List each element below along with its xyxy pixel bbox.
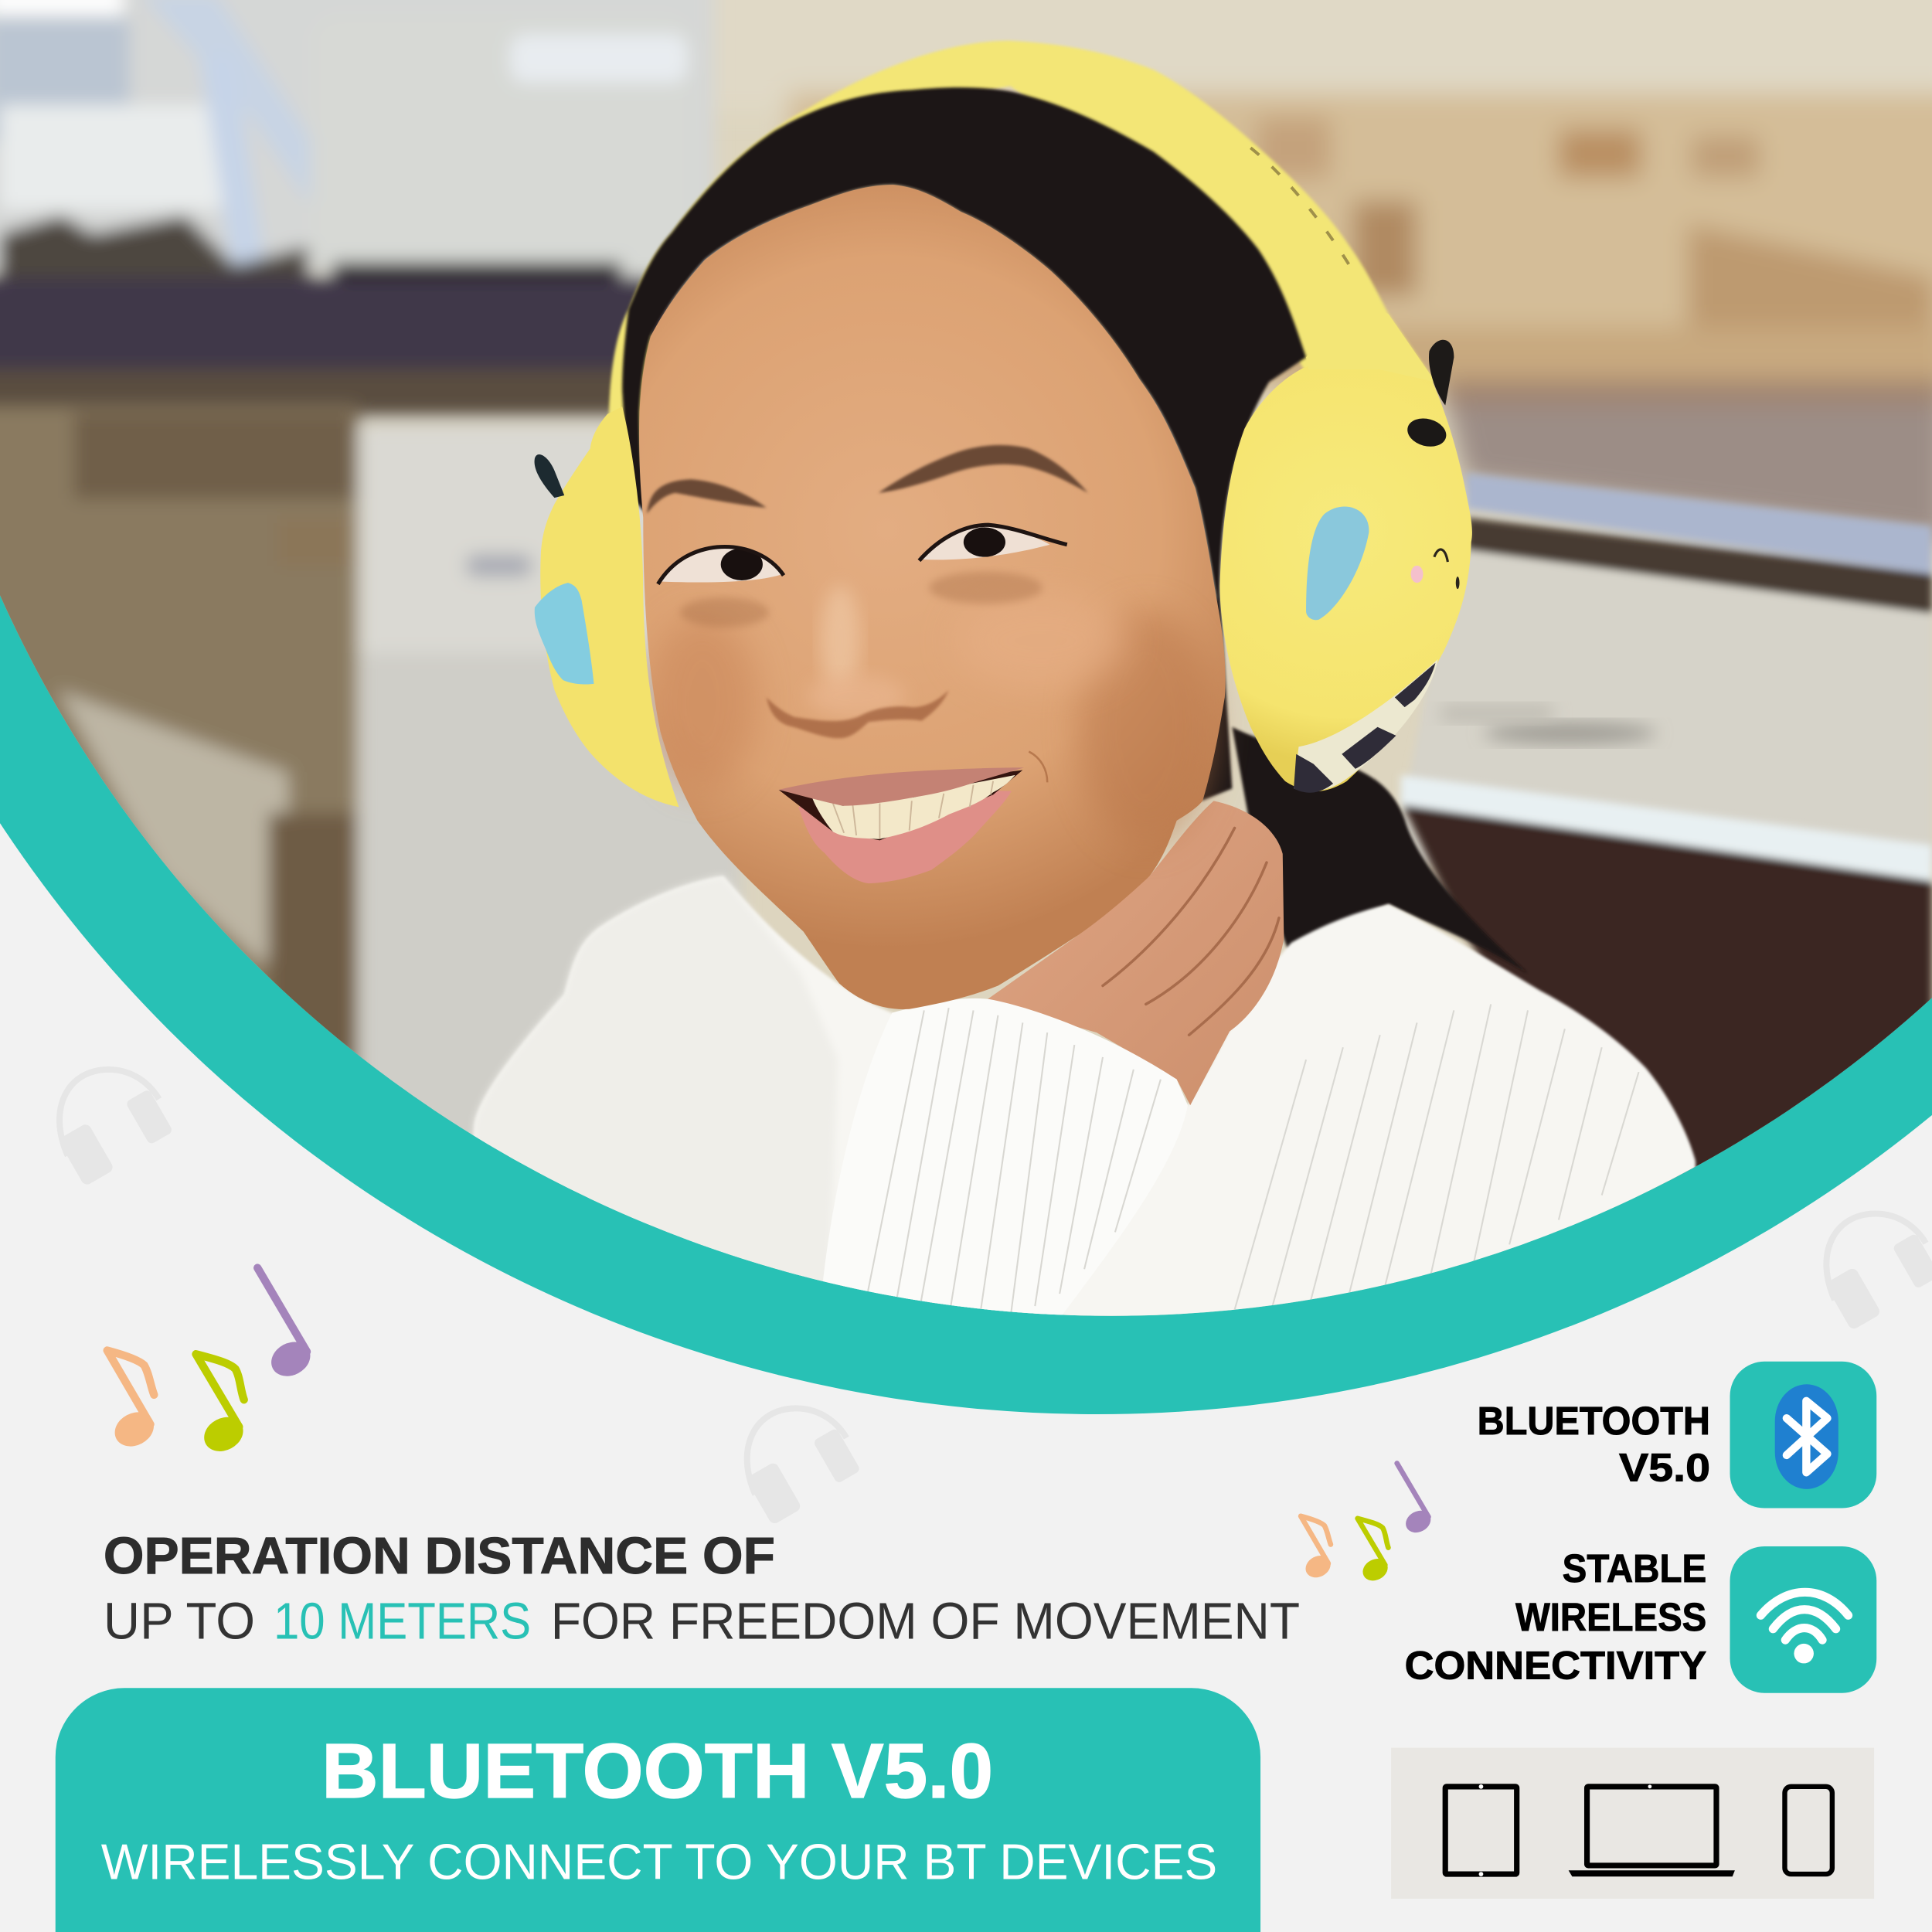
cheek shading right (1078, 610, 1213, 844)
smile crease (1029, 752, 1047, 782)
feature label: stable wireless connectivity: WIRELESS (1515, 1595, 1706, 1639)
bee eye spot (1404, 414, 1449, 451)
bee stripes (1294, 659, 1438, 793)
sweater cuff (819, 998, 1188, 1318)
lower lip (798, 788, 1012, 883)
text: up to 10 meters for freedom of movement (104, 1593, 1300, 1651)
under-eye shadow right (929, 572, 1043, 604)
panel: compatible devices (1391, 1748, 1874, 1899)
left eye (658, 547, 784, 584)
photo background: blurred kitchen (0, 0, 1932, 1355)
cheek glow (1006, 611, 1131, 686)
white ribbed sweater (471, 874, 1698, 1316)
banner heading: BLUETOOTH V5.0 (321, 1728, 993, 1815)
feature label: bluetooth v5.0 (1478, 1399, 1710, 1489)
hand on neck (986, 801, 1284, 1105)
blue wing left (535, 583, 594, 684)
left eyebrow (647, 479, 767, 514)
music notes group large (107, 1268, 316, 1458)
icon: smartphone (1784, 1787, 1832, 1874)
antenna left (535, 454, 564, 498)
under-eye shadow left (680, 597, 769, 628)
text: up to 10 meters for freedom of movement: FOR FREEDOM OF MOVEMENT (551, 1593, 1300, 1651)
banner subtext: WIRELESSLY CONNECT TO YOUR BT DEVICES (101, 1833, 1217, 1889)
panel: bluetooth v5.0 banner (56, 1688, 1260, 1932)
teeth (812, 775, 1015, 839)
feature label: stable wireless connectivity: STABLE (1563, 1546, 1706, 1590)
decorative headphone watermark right (1825, 1213, 1932, 1331)
feature label: stable wireless connectivity (1405, 1546, 1706, 1687)
icon: bluetooth tile (1730, 1362, 1876, 1509)
band joint (1306, 310, 1435, 382)
face (639, 185, 1226, 1009)
icon: laptop (1569, 1784, 1735, 1876)
cheek shading left (647, 616, 758, 788)
orange note (107, 1350, 160, 1453)
green note (196, 1354, 249, 1458)
decorative headphone watermark centre (745, 1408, 861, 1526)
purple note (257, 1268, 316, 1383)
dark hair (622, 87, 1306, 801)
chair (1401, 775, 1932, 1183)
nose (767, 585, 949, 738)
right eyebrow (879, 445, 1088, 493)
smile lips and teeth (779, 752, 1047, 883)
feature label: bluetooth v5.0: V5.0 (1619, 1445, 1710, 1489)
text: up to 10 meters for freedom of movement: UP TO (104, 1593, 255, 1651)
right ear cup: plush bee (1219, 310, 1472, 793)
photo: smiling girl wearing bee earmuff headphones (0, 0, 1932, 1380)
blue wing (1306, 506, 1369, 620)
teal curved band (0, 0, 1932, 1414)
music notes group small (1301, 1463, 1434, 1585)
decorative headphone watermark left (58, 1070, 173, 1186)
feature label: stable wireless connectivity: CONNECTIVITY (1405, 1643, 1706, 1687)
heading: operation distance: OPERATION DISTANCE OF (104, 1527, 775, 1585)
icon: tablet (1445, 1784, 1517, 1876)
icon: wifi tile (1730, 1546, 1876, 1693)
right eye (919, 525, 1067, 560)
smiling face (1411, 549, 1460, 589)
upper lip (779, 767, 1024, 806)
antenna (1429, 340, 1454, 406)
left ear cup: plush bee (535, 406, 679, 807)
text: up to 10 meters for freedom of movement: 10 METERS (274, 1593, 531, 1651)
headband (609, 41, 1435, 468)
feature label: bluetooth v5.0: BLUETOOTH (1478, 1399, 1710, 1443)
long hair behind shoulder (1232, 727, 1528, 974)
